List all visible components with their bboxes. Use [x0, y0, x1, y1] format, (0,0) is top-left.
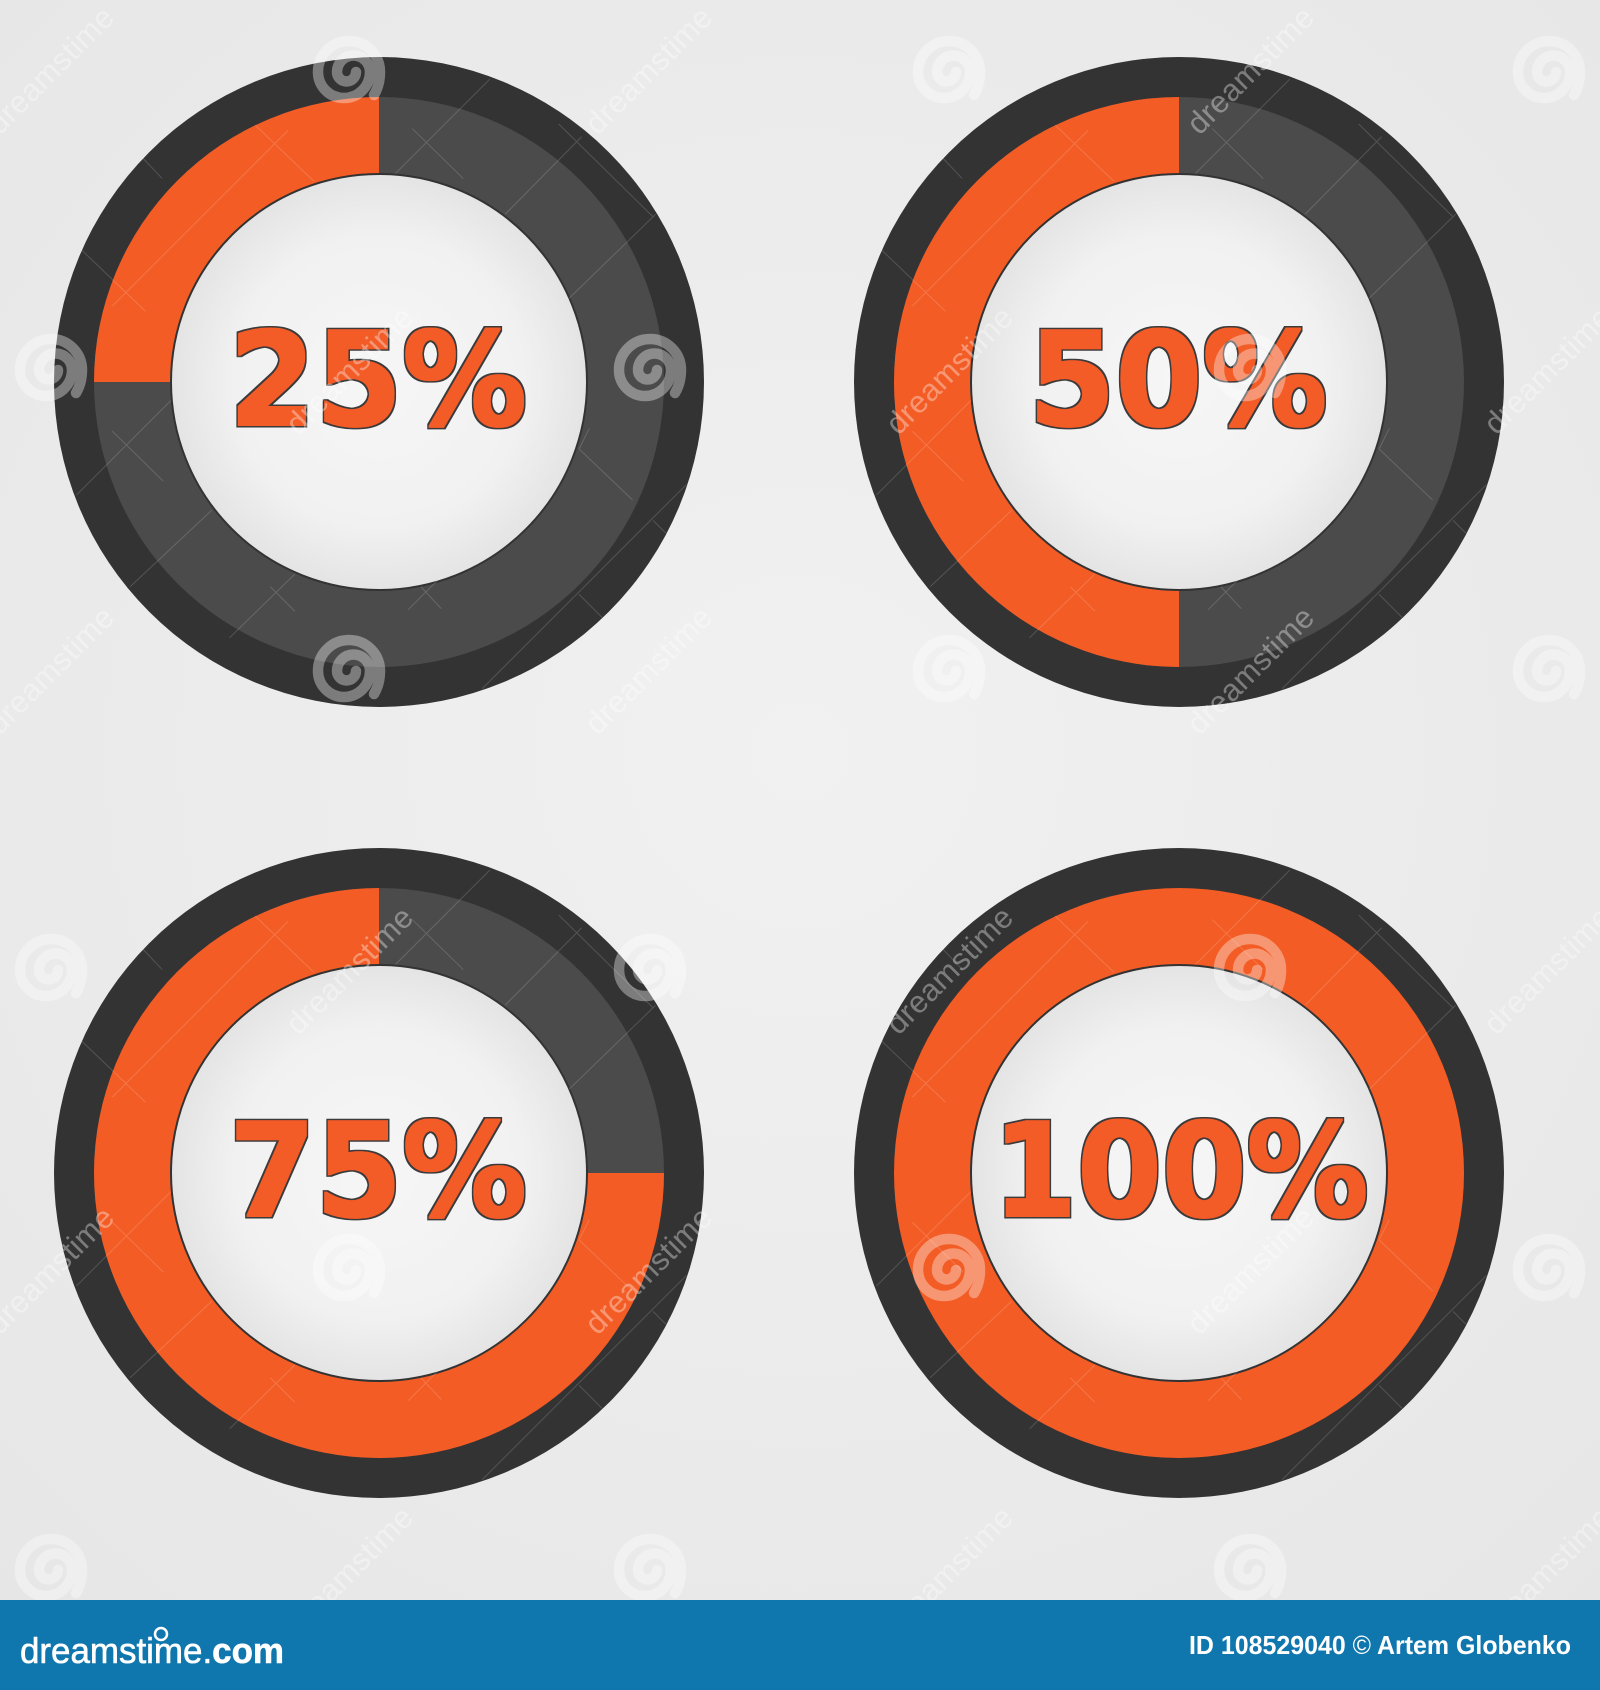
watermark overlay: dreamstime — [1180, 0, 1321, 141]
donut chart: 50% — [854, 57, 1504, 707]
orange segment 25% — [94, 97, 379, 382]
watermark overlay: dreamstime — [1180, 600, 1321, 741]
watermark overlay: dreamstime — [879, 300, 1020, 441]
watermark overlay: dreamstime — [279, 900, 420, 1041]
label 100%: 100% — [992, 1095, 1368, 1247]
watermark overlay: dreamstime — [578, 1200, 719, 1341]
logo spiral icon — [155, 1628, 167, 1640]
watermark overlay: dreamstime — [578, 0, 719, 141]
label 75%: 75% — [229, 1095, 527, 1247]
watermark overlay: dreamstime — [879, 1500, 1020, 1641]
footer logo: dreamstime.com — [20, 1630, 284, 1671]
watermark overlay: dreamstime — [879, 900, 1020, 1041]
donut chart: 25% — [54, 57, 704, 707]
footer bar — [0, 1600, 1600, 1690]
watermark overlay: dreamstime — [578, 600, 719, 741]
image credit: ID 108529040 © Artem Globenko — [1189, 1630, 1571, 1660]
orange segment 75% — [94, 888, 664, 1458]
label 25%: 25% — [229, 304, 527, 456]
label 50%: 50% — [1028, 304, 1328, 456]
donut chart: 75% — [54, 848, 704, 1498]
watermark overlay: dreamstime — [279, 300, 420, 441]
donut chart: 100% — [854, 848, 1504, 1498]
orange segment 50% — [894, 97, 1179, 667]
watermark overlay: dreamstime — [1180, 1200, 1321, 1341]
watermark overlay: dreamstime — [279, 1500, 420, 1641]
